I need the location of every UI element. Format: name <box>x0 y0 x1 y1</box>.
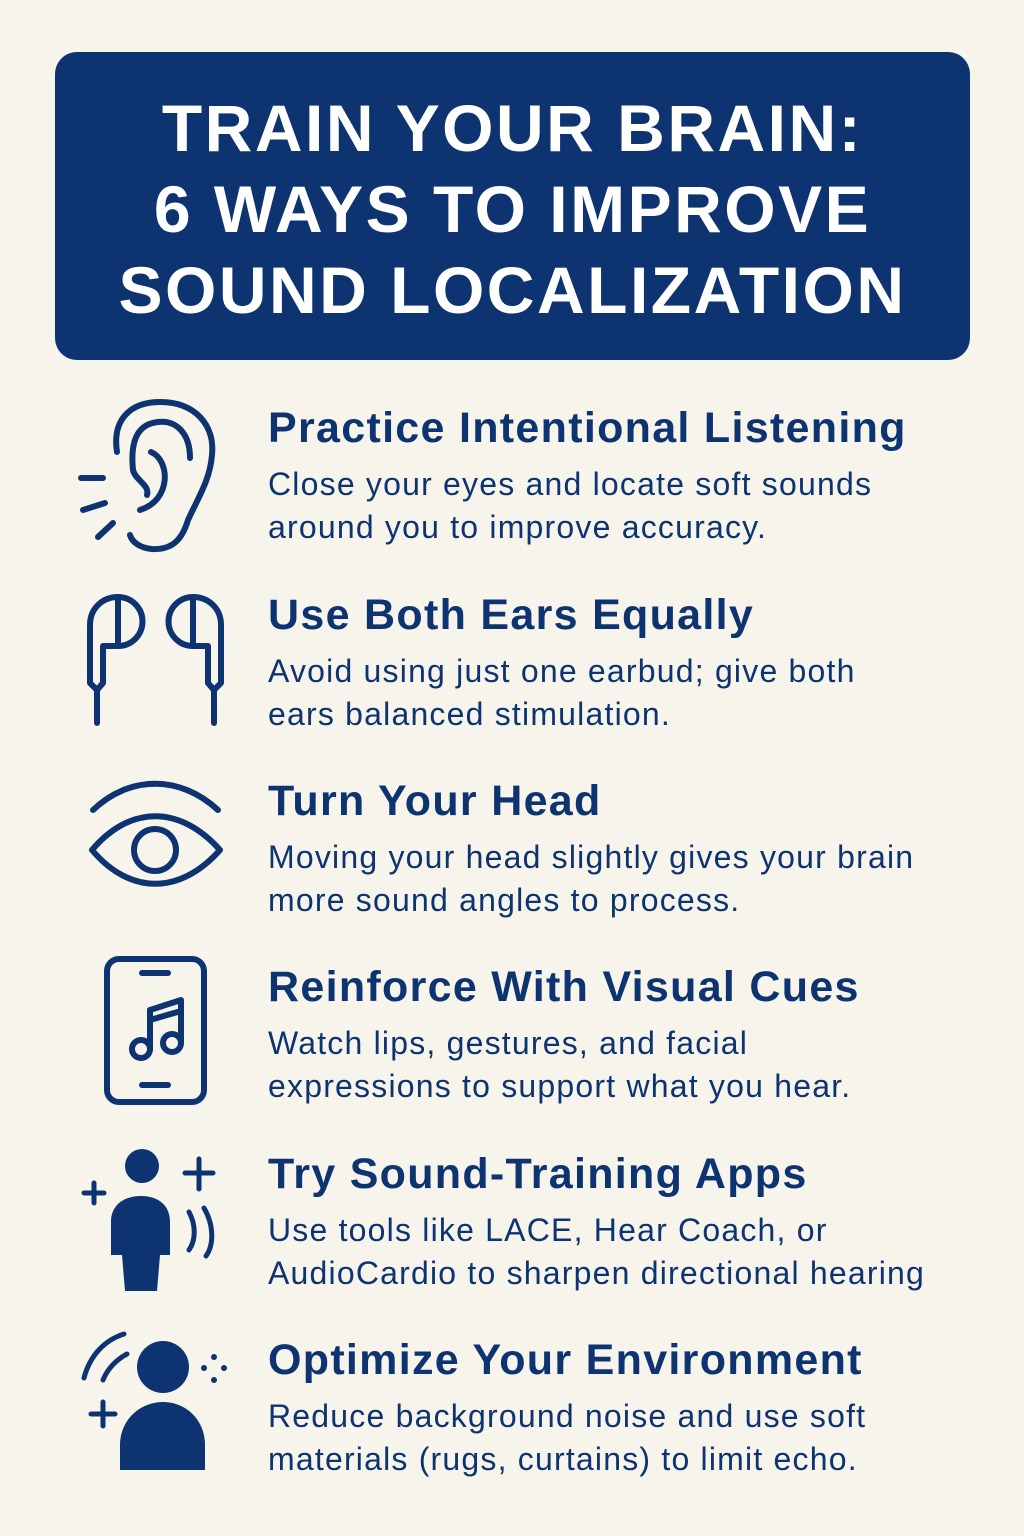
item 3: Moving your head slightly gives your brain <box>268 839 914 875</box>
icon: person with sound <box>84 1149 213 1291</box>
title <box>55 52 970 360</box>
item 5: Try Sound-Training Apps <box>268 1150 808 1198</box>
icon: eye <box>92 784 220 884</box>
icon: earbuds <box>90 597 221 723</box>
title: 6 WAYS TO IMPROVE <box>154 172 871 246</box>
icon: phone with music note <box>107 959 204 1102</box>
item 1: around you to improve accuracy. <box>268 509 767 545</box>
item 2: Avoid using just one earbud; give both <box>268 653 856 689</box>
item 4: Reinforce With Visual Cues <box>268 963 860 1011</box>
item 2 <box>268 591 856 732</box>
item 4: Watch lips, gestures, and facial <box>268 1025 748 1061</box>
item 3: more sound angles to process. <box>268 882 740 918</box>
icon: ear <box>81 402 212 549</box>
item 5: Use tools like LACE, Hear Coach, or <box>268 1212 828 1248</box>
item 1 <box>268 404 907 545</box>
item 6 <box>268 1336 866 1477</box>
item 2: ears balanced stimulation. <box>268 696 671 732</box>
item 1: Practice Intentional Listening <box>268 404 907 452</box>
item 3 <box>268 777 914 918</box>
icon: person in environment <box>84 1334 227 1470</box>
item 5: AudioCardio to sharpen directional hearing <box>268 1255 925 1291</box>
item 6: materials (rugs, curtains) to limit echo. <box>268 1441 858 1477</box>
item 4: expressions to support what you hear. <box>268 1068 851 1104</box>
item 5 <box>268 1150 925 1291</box>
title: SOUND LOCALIZATION <box>118 253 907 327</box>
item 1: Close your eyes and locate soft sounds <box>268 466 872 502</box>
item 6: Optimize Your Environment <box>268 1336 863 1384</box>
item 2: Use Both Ears Equally <box>268 591 754 639</box>
item 3: Turn Your Head <box>268 777 602 825</box>
item 6: Reduce background noise and use soft <box>268 1398 866 1434</box>
title: TRAIN YOUR BRAIN: <box>162 91 863 165</box>
item 4 <box>268 963 860 1104</box>
